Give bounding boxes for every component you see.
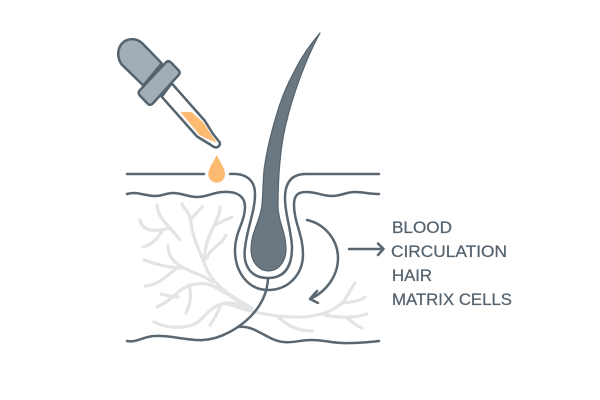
labels: HAIR <box>392 267 432 285</box>
dermis lower line with nerve stem <box>127 279 379 343</box>
labels: BLOOD <box>392 219 452 237</box>
blood vessels: right tree <box>225 283 367 331</box>
labels: CIRCULATION <box>391 243 507 261</box>
labels <box>391 219 512 309</box>
dropper collar <box>139 61 180 105</box>
curved arrow <box>307 220 338 303</box>
skin surface and follicle inner wall <box>127 174 379 278</box>
icon: serum droplet <box>208 155 225 183</box>
serum in tube <box>180 112 217 143</box>
dropper glass tube <box>162 83 220 148</box>
blood vessels: left tree <box>140 204 252 327</box>
hair shaft and bulb <box>251 33 320 271</box>
icon: dropper <box>118 39 220 148</box>
dermis upper line and follicle outer wall <box>127 192 379 290</box>
labels: MATRIX CELLS <box>392 291 512 309</box>
dropper rubber bulb <box>118 39 162 86</box>
pointer arrow to labels <box>349 244 384 255</box>
